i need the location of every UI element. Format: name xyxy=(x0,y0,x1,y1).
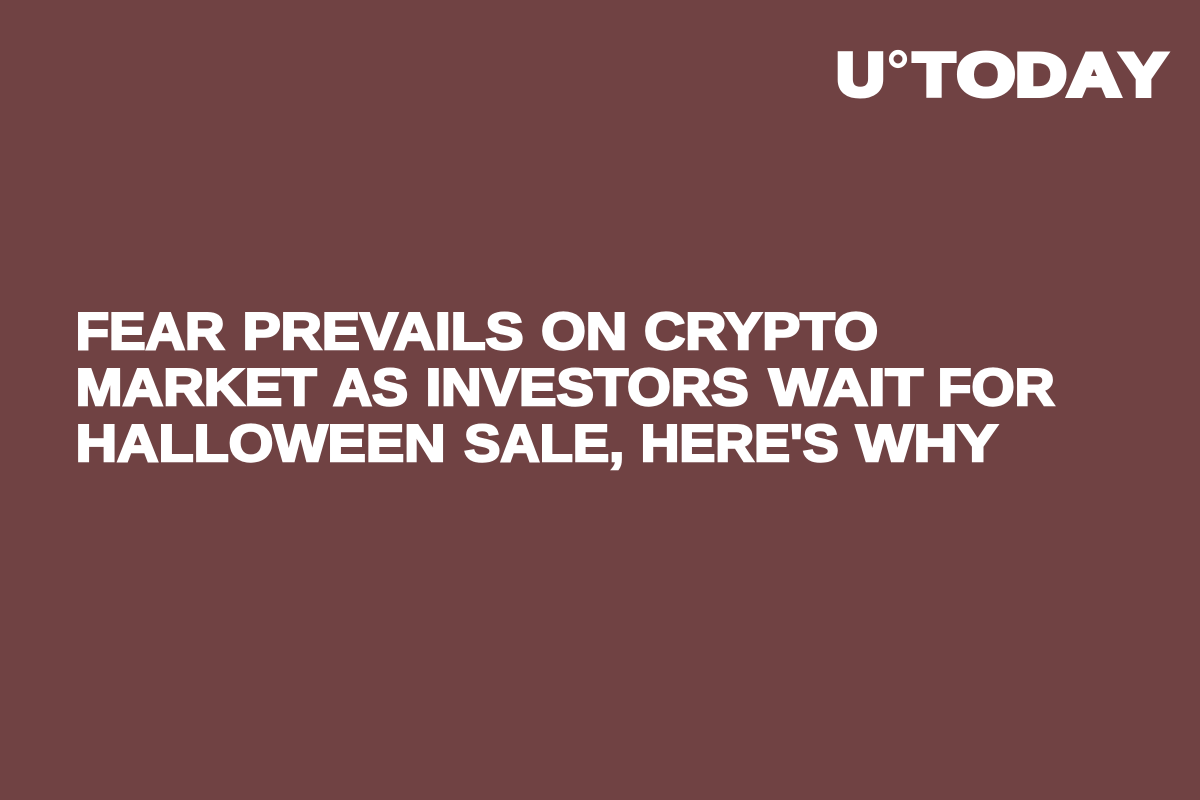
title line 2: WAIT xyxy=(769,359,923,417)
title line 2: INVESTORS xyxy=(426,359,749,417)
title line 2: AS xyxy=(333,359,408,417)
logo word TODAY: D xyxy=(1016,42,1066,108)
title line 2 xyxy=(76,359,1055,417)
title line 3 xyxy=(76,415,998,473)
title line 1: CRYPTO xyxy=(644,303,878,361)
logo word TODAY: A xyxy=(1068,42,1120,108)
logo degree ring xyxy=(891,52,905,66)
logo word TODAY: T xyxy=(914,42,954,108)
title line 3: HERE'S xyxy=(641,415,839,473)
title line 3: WHY xyxy=(856,415,998,473)
logo letter U: U xyxy=(836,42,884,108)
title line 3: SALE, xyxy=(464,415,624,473)
title line 1: ON xyxy=(541,303,627,361)
logo word TODAY: O xyxy=(957,42,1015,108)
logo word TODAY xyxy=(914,42,1166,108)
title line 3: HALLOWEEN xyxy=(76,415,446,473)
title line 2: FOR xyxy=(938,359,1055,417)
title xyxy=(76,303,1055,473)
logo: U.Today xyxy=(836,42,1166,108)
title line 1: PREVAILS xyxy=(243,303,524,361)
logo word TODAY: Y xyxy=(1120,42,1166,108)
title line 1 xyxy=(76,303,878,361)
title line 1: FEAR xyxy=(76,303,225,361)
title line 2: MARKET xyxy=(76,359,317,417)
